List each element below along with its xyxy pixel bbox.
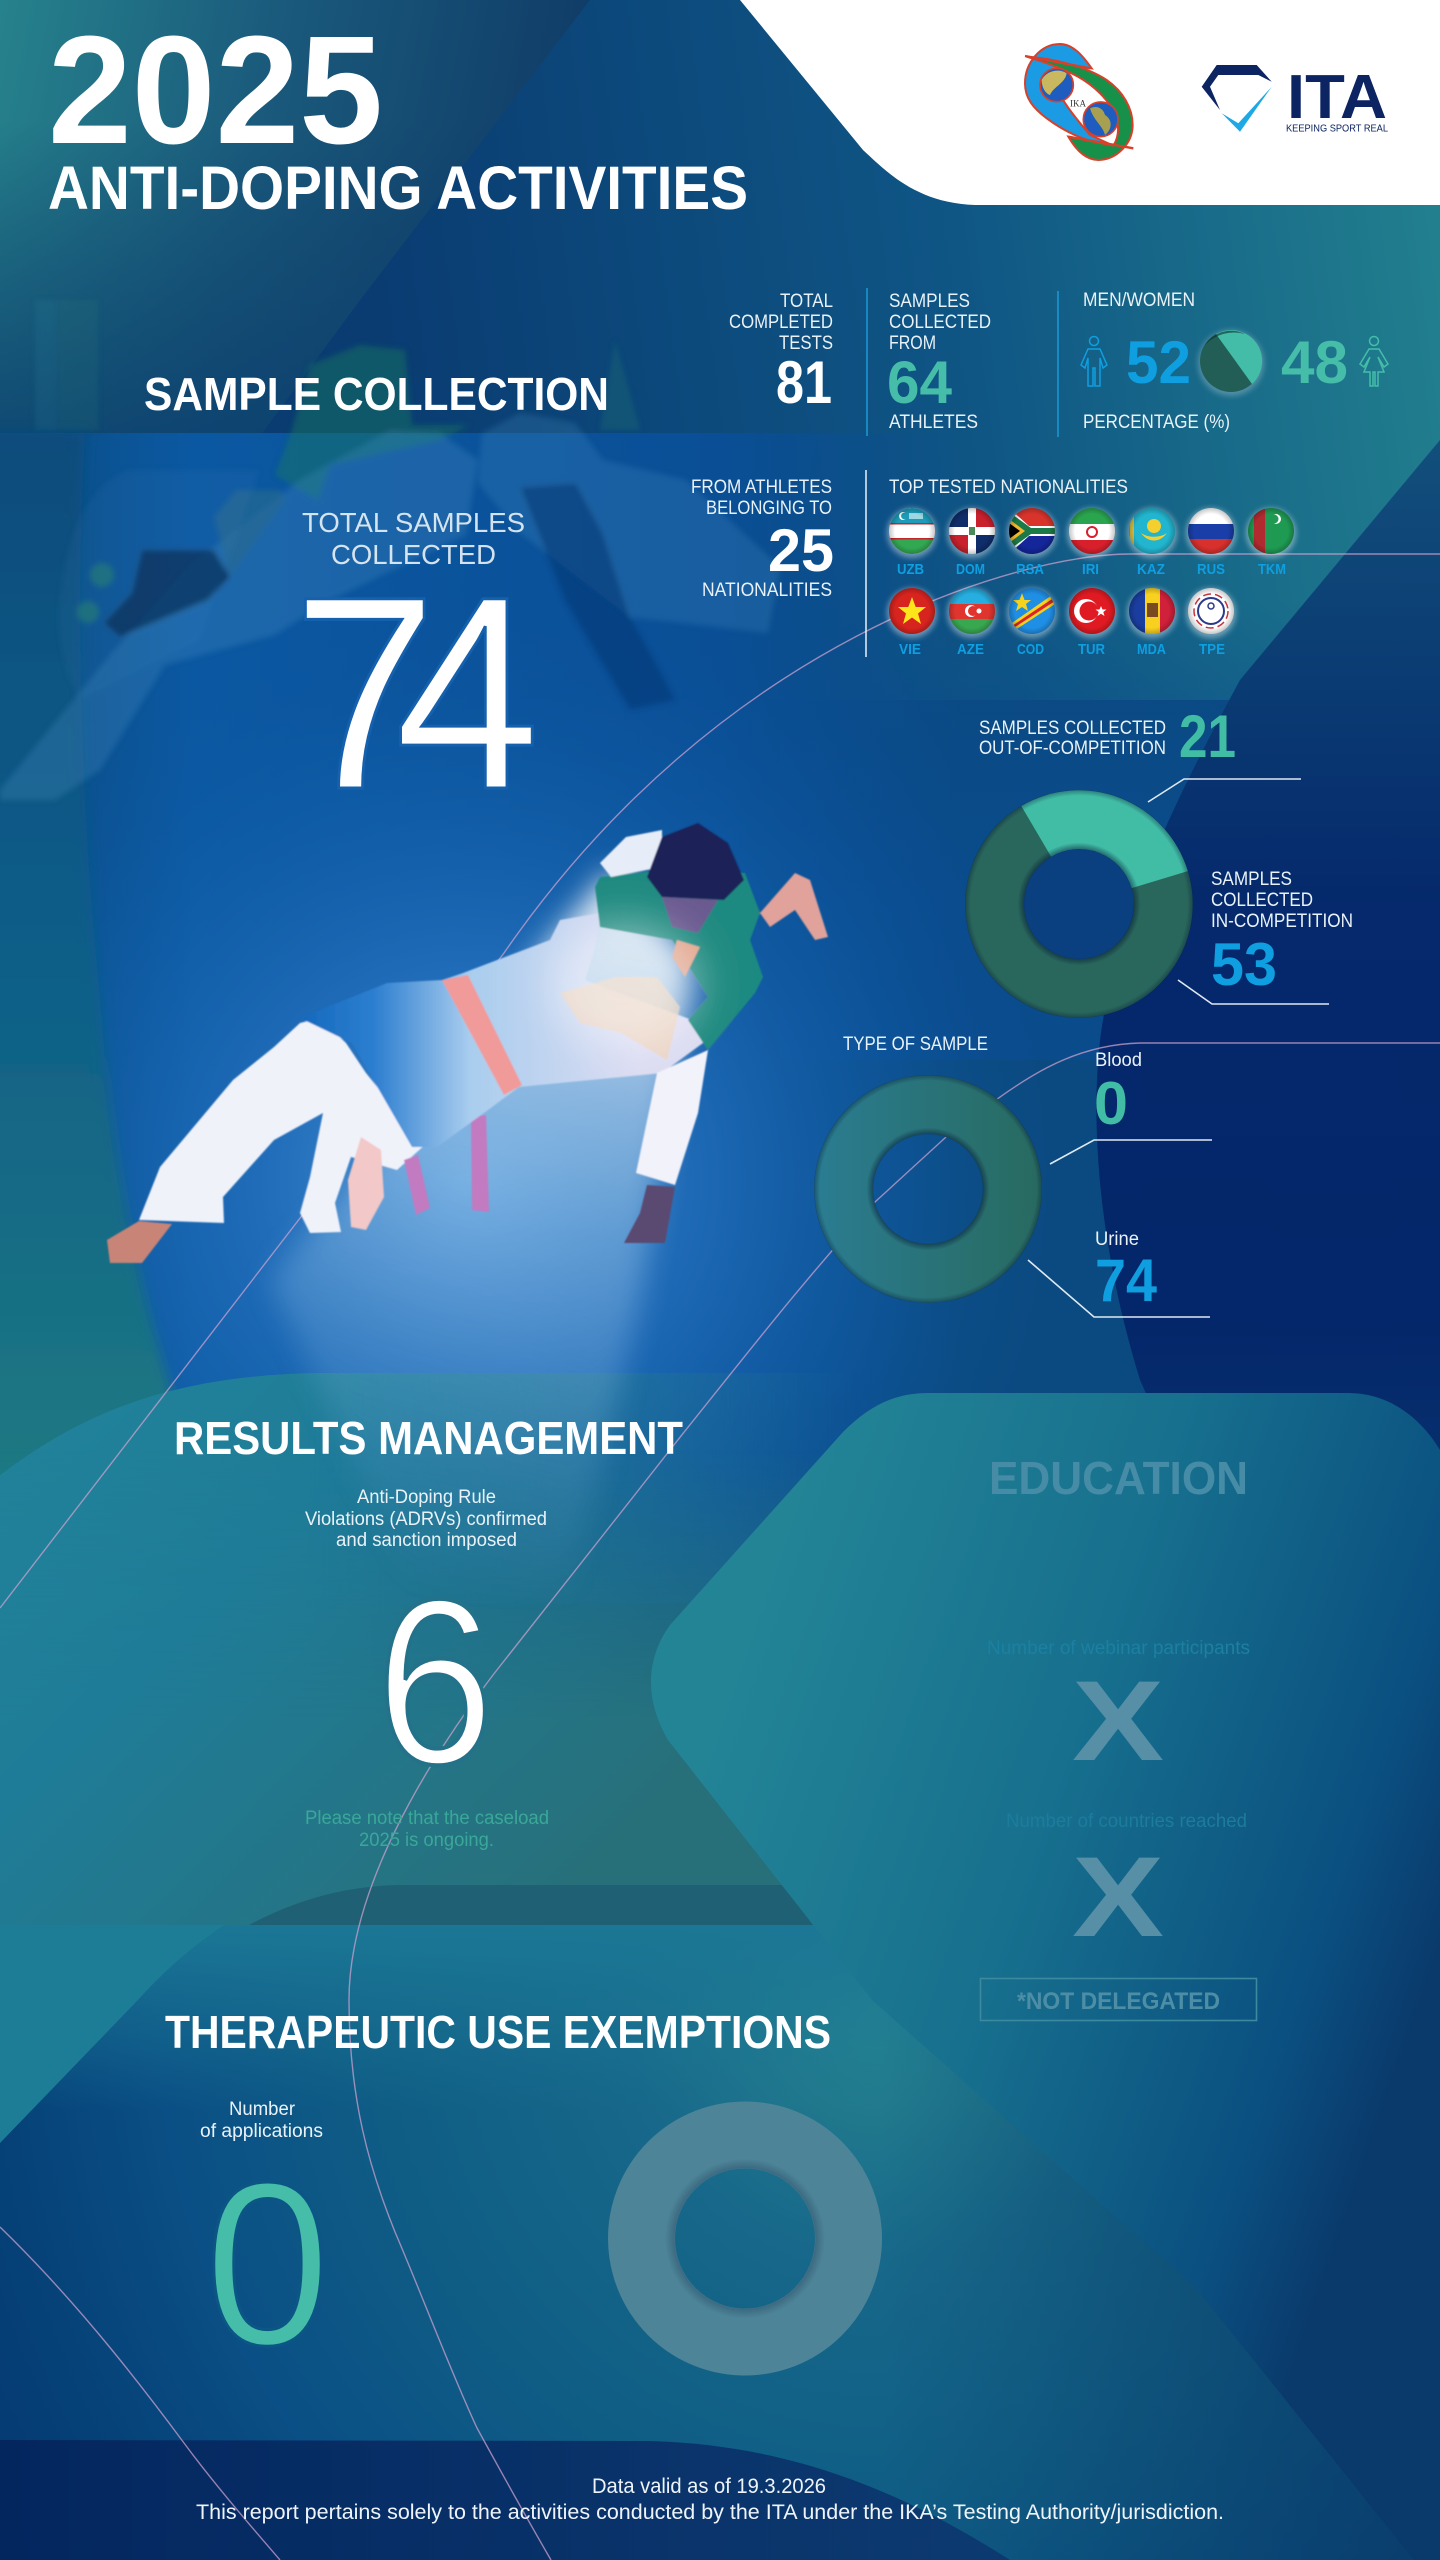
title [48, 4, 748, 222]
hair [647, 823, 744, 900]
panel: education: Number of countries reached [1006, 1811, 1247, 1832]
flag: TPE [1188, 588, 1234, 634]
foot: centre [348, 1137, 384, 1230]
panel: samples in / out of competition: OUT-OF-COMPETITION [979, 738, 1166, 759]
stat: men / women percentage: MEN/WOMEN [1083, 290, 1195, 311]
panel: samples in / out of competition: COLLECTED [1211, 890, 1313, 911]
stat: total completed tests: 81 [776, 349, 832, 416]
panel: samples in / out of competition: IN-COMPETITION [1211, 911, 1353, 932]
logo: IKA: IKA [1070, 99, 1086, 109]
nationality codes: AZE [957, 641, 984, 658]
stat: men / women percentage: PERCENTAGE (%) [1083, 412, 1230, 433]
title: ANTI-DOPING ACTIVITIES [48, 154, 748, 222]
trousers [139, 1018, 427, 1233]
panel: type of sample: Blood [1095, 1050, 1142, 1071]
dividers [866, 288, 1058, 657]
stat: samples collected from athletes: SAMPLES [889, 291, 970, 312]
logo: ITA: KEEPING SPORT REAL [1286, 122, 1388, 134]
flag: RUS [1188, 508, 1234, 554]
flag: UZB [889, 508, 935, 554]
decorative curve lines [0, 554, 1440, 2560]
torso [300, 913, 703, 1147]
nationality codes: VIE [899, 641, 921, 658]
stat: nationalities: 25 [768, 517, 834, 584]
nationality codes: UZB [897, 561, 924, 578]
logo: ITA [1202, 63, 1388, 134]
belt [442, 975, 522, 1095]
stat: total samples collected: COLLECTED [331, 539, 496, 570]
flag: VIE [889, 588, 935, 634]
nationality codes: IRI [1082, 561, 1099, 578]
stat: total completed tests: COMPLETED [729, 312, 833, 333]
flag: TUR [1069, 588, 1115, 634]
flag: RSA [1009, 508, 1055, 554]
footer note: Data valid as of 19.3.2026 [592, 2475, 826, 2498]
nationality codes: TPE [1199, 641, 1225, 658]
panel: samples in / out of competition: 21 [1179, 703, 1236, 770]
nationality codes: RUS [1197, 561, 1225, 578]
stat: samples collected from athletes: 64 [887, 349, 953, 416]
panel: education: X [1072, 1834, 1164, 1961]
icon: man [1081, 336, 1107, 386]
panel: therapeutic use exemptions: THERAPEUTIC USE EXEMPTIONS [165, 2006, 831, 2058]
foot: right [760, 873, 828, 940]
panel: education: EDUCATION [989, 1452, 1248, 1504]
stat: total completed tests: TESTS [779, 333, 833, 354]
flag glows [887, 508, 1296, 638]
donut chart: competition [965, 790, 1193, 1018]
panel: results management: and sanction imposed [336, 1530, 517, 1551]
panel: therapeutic use exemptions: Number [229, 2099, 296, 2120]
flag: COD [1009, 588, 1055, 634]
title: 2025 [48, 4, 383, 176]
heading: top tested nationalities: TOP TESTED NATIONALITIES [889, 477, 1128, 498]
stat: samples collected from athletes: ATHLETES [889, 412, 978, 433]
stat: samples collected from athletes [887, 291, 991, 433]
panel: type of sample: 0 [1094, 1070, 1128, 1137]
panel: results management: 2025 is ongoing. [359, 1830, 494, 1851]
logo: ITA: ITA [1287, 63, 1387, 132]
panel: samples in / out of competition: SAMPLES COLLECTED [979, 718, 1166, 739]
background photo: ghosted judokas [0, 300, 780, 800]
nationality codes: KAZ [1137, 561, 1165, 578]
header: white logo panel [740, 0, 1440, 205]
not delegated box [980, 1978, 1256, 2020]
panel: education [980, 1452, 1256, 2020]
flag: MDA [1129, 588, 1175, 634]
panel: samples in / out of competition: 53 [1211, 931, 1277, 998]
nationality codes: TUR [1078, 641, 1105, 658]
stat: nationalities: NATIONALITIES [702, 580, 832, 601]
stat: men / women percentage [1081, 290, 1388, 433]
panel: type of sample [814, 1034, 1212, 1317]
stat: total samples collected: TOTAL SAMPLES [302, 507, 525, 538]
panel: results management [174, 1412, 683, 1851]
logo: IKA [1025, 44, 1133, 160]
face [662, 897, 718, 933]
illustration: judokas [107, 823, 828, 1263]
blond hair [560, 977, 680, 1060]
footer note: This report pertains solely to the activities conducted by the ITA under the IKA’s Testing Authority/jurisdiction. [196, 2501, 1224, 2524]
white glow overlay [550, 920, 700, 1050]
panel: results management: RESULTS MANAGEMENT [174, 1412, 683, 1464]
panel: therapeutic use exemptions: 0 [205, 2135, 330, 2394]
stat: samples collected from athletes: COLLECTED [889, 312, 991, 333]
green jacket [595, 870, 763, 1050]
panel: results management: Anti-Doping Rule [357, 1487, 496, 1508]
panel: type of sample: 74 [1095, 1247, 1158, 1314]
pie: men/women split [1198, 330, 1264, 396]
nationality codes: TKM [1258, 561, 1286, 578]
stat: men / women percentage: 48 [1281, 329, 1348, 396]
flag: KAZ [1129, 508, 1175, 554]
hand [624, 1185, 675, 1243]
panel: results management: Violations (ADRVs) confirmed [305, 1509, 547, 1530]
panel: type of sample: TYPE OF SAMPLE [843, 1034, 988, 1055]
panel: samples in / out of competition [965, 703, 1353, 1018]
flag gloss overlay [889, 508, 1294, 634]
panel: education: Number of webinar participants [987, 1638, 1250, 1659]
stat: men / women percentage: 52 [1126, 329, 1191, 396]
nationality codes: RSA [1016, 561, 1044, 578]
flag: TKM [1248, 508, 1294, 554]
panel: samples in / out of competition: SAMPLES [1211, 869, 1292, 890]
donut chart: type of sample [814, 1075, 1042, 1303]
panel: results management: 6 [376, 1550, 494, 1813]
not delegated box: *NOT DELEGATED [1017, 1988, 1220, 2015]
panel: education: X [1072, 1658, 1164, 1785]
stat: total completed tests: TOTAL [780, 291, 833, 312]
footer note [196, 2475, 1224, 2524]
flag: IRI [1069, 508, 1115, 554]
light beam [270, 870, 690, 1590]
icon: woman [1360, 336, 1388, 386]
white collar [600, 830, 662, 877]
panel: results management: Please note that the caseload [305, 1808, 549, 1829]
sleeve [636, 1050, 708, 1185]
donut chart: TUE [607, 2100, 883, 2376]
flag: DOM [949, 508, 995, 554]
panel: therapeutic use exemptions [165, 2006, 883, 2394]
nationality codes: COD [1017, 641, 1044, 658]
neck [672, 940, 700, 977]
heading: sample collection: SAMPLE COLLECTION [144, 368, 609, 420]
foot: left [107, 1221, 172, 1263]
panel: therapeutic use exemptions: of applications [200, 2121, 323, 2142]
flag: AZE [949, 588, 995, 634]
stat: samples collected from athletes: FROM [889, 333, 936, 354]
nationality codes: MDA [1137, 641, 1166, 658]
panel: type of sample: Urine [1095, 1229, 1139, 1250]
stat: nationalities [691, 477, 834, 601]
nationality codes [897, 561, 1286, 658]
belt ends [404, 1155, 430, 1215]
stat: nationalities: FROM ATHLETES [691, 477, 832, 498]
stat: total samples collected: 74 [292, 539, 540, 846]
stat: nationalities: BELONGING TO [706, 498, 832, 519]
stat: total completed tests [729, 291, 833, 416]
nationality codes: DOM [956, 561, 985, 578]
